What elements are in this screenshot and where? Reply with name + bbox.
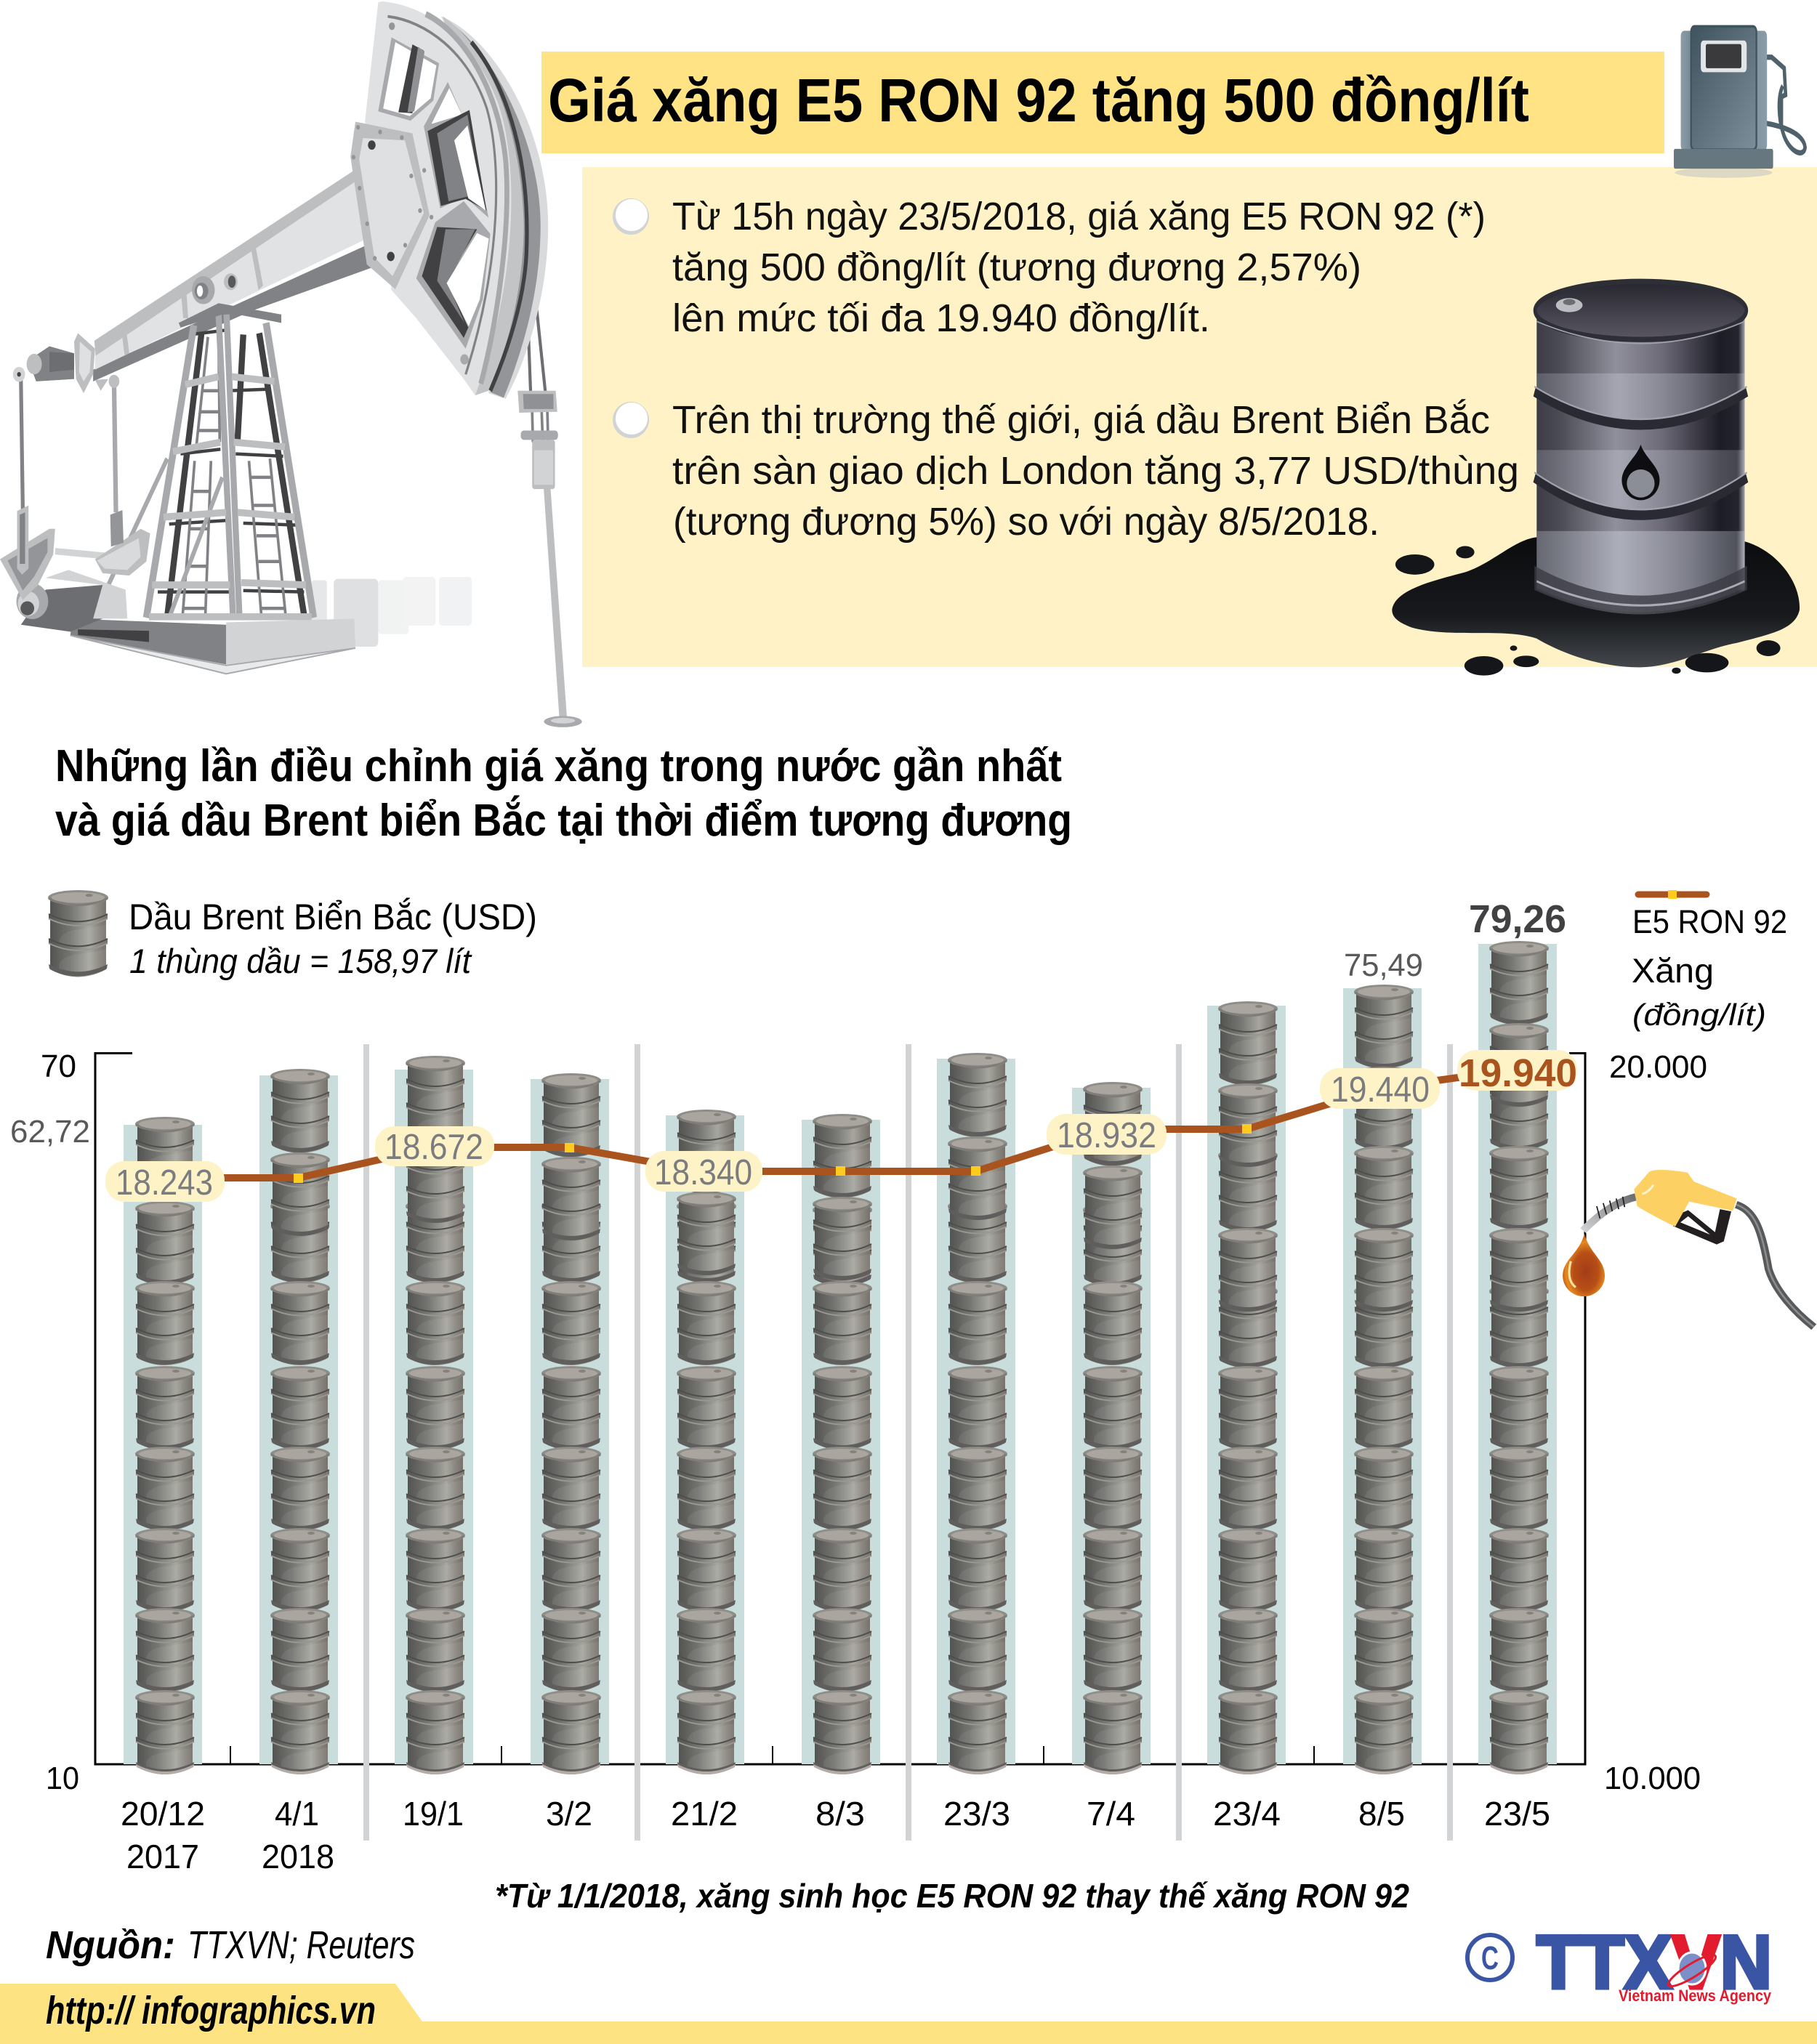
- price label 18.932: 18.932: [1057, 1116, 1156, 1155]
- icon: fuel nozzle and drop: [1563, 1170, 1814, 1327]
- x axis date labels: [121, 1795, 1550, 1875]
- bar 4/1/2018: [259, 1069, 338, 1774]
- x axis date labels: 3/2: [546, 1795, 592, 1833]
- footer band with url: [0, 1984, 1817, 2044]
- bar 23/5: [1478, 941, 1557, 1774]
- bar 8/5: [1343, 985, 1422, 1774]
- horse head and bridle: [13, 334, 119, 393]
- paragraph 1: [672, 195, 1486, 340]
- heading: chart subtitle: Những lần điều chỉnh giá xăng trong nước gần nhất: [55, 741, 1062, 791]
- bar chart: barrels: [124, 941, 1557, 1774]
- paragraph 1: tăng 500 đồng/lít (tương đương 2,57%): [672, 246, 1361, 289]
- heading: chart subtitle: và giá dầu Brent biển Bắc tại thời điểm tương đương: [55, 796, 1072, 846]
- polished rod and carrier: [517, 248, 582, 727]
- x axis date labels: 23/5: [1484, 1795, 1550, 1833]
- logo: TTXVN Vietnam News Agency: [1467, 1920, 1772, 2005]
- motor block and counterweights: [0, 379, 150, 631]
- axis and value labels: 10.000: [1604, 1761, 1701, 1796]
- axis and value labels: [10, 897, 1707, 1796]
- globe emblem: [1665, 1950, 1719, 1991]
- bar 23/3: [937, 1053, 1015, 1774]
- axis and value labels: 62,72: [10, 1114, 90, 1150]
- axis and value labels: 70: [41, 1049, 76, 1084]
- TTXVN wordmark: TTXVN: [1536, 1920, 1772, 2005]
- bullet 2: [613, 402, 649, 438]
- copyright mark: C: [1481, 1939, 1499, 1976]
- sector head: [365, 1, 548, 399]
- x axis date labels: 2018: [262, 1838, 334, 1875]
- bar 23/4: [1207, 1001, 1286, 1774]
- legend: E5 RON 92: (đồng/lít): [1632, 998, 1766, 1032]
- logo: TTXVN Vietnam News Agency: Vietnam News Agency: [1619, 1987, 1772, 2005]
- oil puddle: [1392, 537, 1800, 676]
- axis and value labels: 20.000: [1609, 1049, 1707, 1085]
- x axis date labels: 19/1: [403, 1795, 464, 1833]
- x axis date labels: 23/4: [1213, 1795, 1281, 1833]
- price label 18.243: 18.243: [116, 1163, 213, 1203]
- illustration: oil barrel and spill: [1392, 281, 1800, 676]
- price label 18.340: 18.340: [654, 1153, 752, 1192]
- legend: E5 RON 92: Xăng: [1632, 951, 1714, 990]
- x axis date labels: 7/4: [1087, 1795, 1135, 1833]
- paragraph 2: (tương đương 5%) so với ngày 8/5/2018.: [673, 500, 1379, 544]
- barrel body: [1534, 281, 1747, 614]
- bar 20/12/2017: [124, 1117, 202, 1774]
- title bar: Giá xăng E5 RON 92 tăng 500 đồng/lít: [548, 66, 1529, 134]
- walking beam: [93, 171, 374, 381]
- legend: Brent barrel: [48, 890, 537, 980]
- legend: Brent barrel: Dầu Brent Biển Bắc (USD): [129, 897, 537, 937]
- concrete base: [70, 618, 355, 674]
- icon: gas pump: [1674, 26, 1805, 178]
- x axis date labels: 8/3: [815, 1795, 865, 1833]
- pump jack illustration: [0, 1, 582, 727]
- x axis date labels: 21/2: [671, 1795, 738, 1833]
- source: Nguồn:: [46, 1923, 175, 1967]
- line chart: E5 RON 92 price: [105, 1050, 1577, 1203]
- x axis date labels: 23/3: [943, 1795, 1010, 1833]
- paragraph 1: Từ 15h ngày 23/5/2018, giá xăng E5 RON 92 (*): [672, 195, 1486, 238]
- paragraph 2: Trên thị trường thế giới, giá dầu Brent Biển Bắc: [672, 398, 1490, 442]
- period separators: [363, 1044, 1453, 1841]
- bar 21/2: [666, 1110, 744, 1774]
- price label 19.440: 19.440: [1331, 1070, 1430, 1110]
- faded barrels behind pump jack: [312, 577, 472, 647]
- footer band with url: http:// infographics.vn: [46, 1989, 376, 2032]
- footnote: *Từ 1/1/2018, xăng sinh học E5 RON 92 thay thế xăng RON 92: [495, 1877, 1409, 1915]
- bar 3/2: [531, 1073, 609, 1774]
- paragraph 1: lên mức tối đa 19.940 đồng/lít.: [672, 296, 1210, 340]
- legend: E5 RON 92: [1632, 890, 1787, 1032]
- x axis date labels: 2017: [126, 1838, 199, 1875]
- axis and value labels: 75,49: [1344, 948, 1423, 983]
- legend: Brent barrel: 1 thùng dầu = 158,97 lít: [129, 942, 472, 980]
- tower: [93, 303, 313, 618]
- price label 18.672: 18.672: [384, 1128, 483, 1167]
- paragraph 2: [672, 398, 1519, 544]
- axis and value labels: 10: [46, 1761, 79, 1796]
- mounting plate: [350, 121, 433, 289]
- x axis date labels: 20/12: [121, 1795, 205, 1833]
- copyright mark: [1467, 1935, 1512, 1980]
- x axis date labels: 4/1: [275, 1795, 319, 1833]
- bar 19/1: [395, 1056, 473, 1774]
- heading: chart subtitle: [55, 741, 1072, 846]
- bar 7/4: [1072, 1082, 1151, 1774]
- bar 8/3: [802, 1114, 880, 1774]
- chart axes: [95, 1054, 1585, 1764]
- bullet 1: [613, 198, 649, 235]
- title bar: [541, 52, 1664, 153]
- paragraph 2: trên sàn giao dịch London tăng 3,77 USD/thùng: [672, 449, 1519, 493]
- panel: summary text: [582, 167, 1817, 667]
- legend: E5 RON 92: E5 RON 92: [1632, 903, 1787, 940]
- source: [46, 1923, 415, 1967]
- axis and value labels: 79,26: [1469, 897, 1566, 941]
- x axis date labels: 8/5: [1358, 1795, 1405, 1833]
- source: TTXVN; Reuters: [188, 1923, 415, 1967]
- price label 19.940: 19.940: [1459, 1051, 1577, 1095]
